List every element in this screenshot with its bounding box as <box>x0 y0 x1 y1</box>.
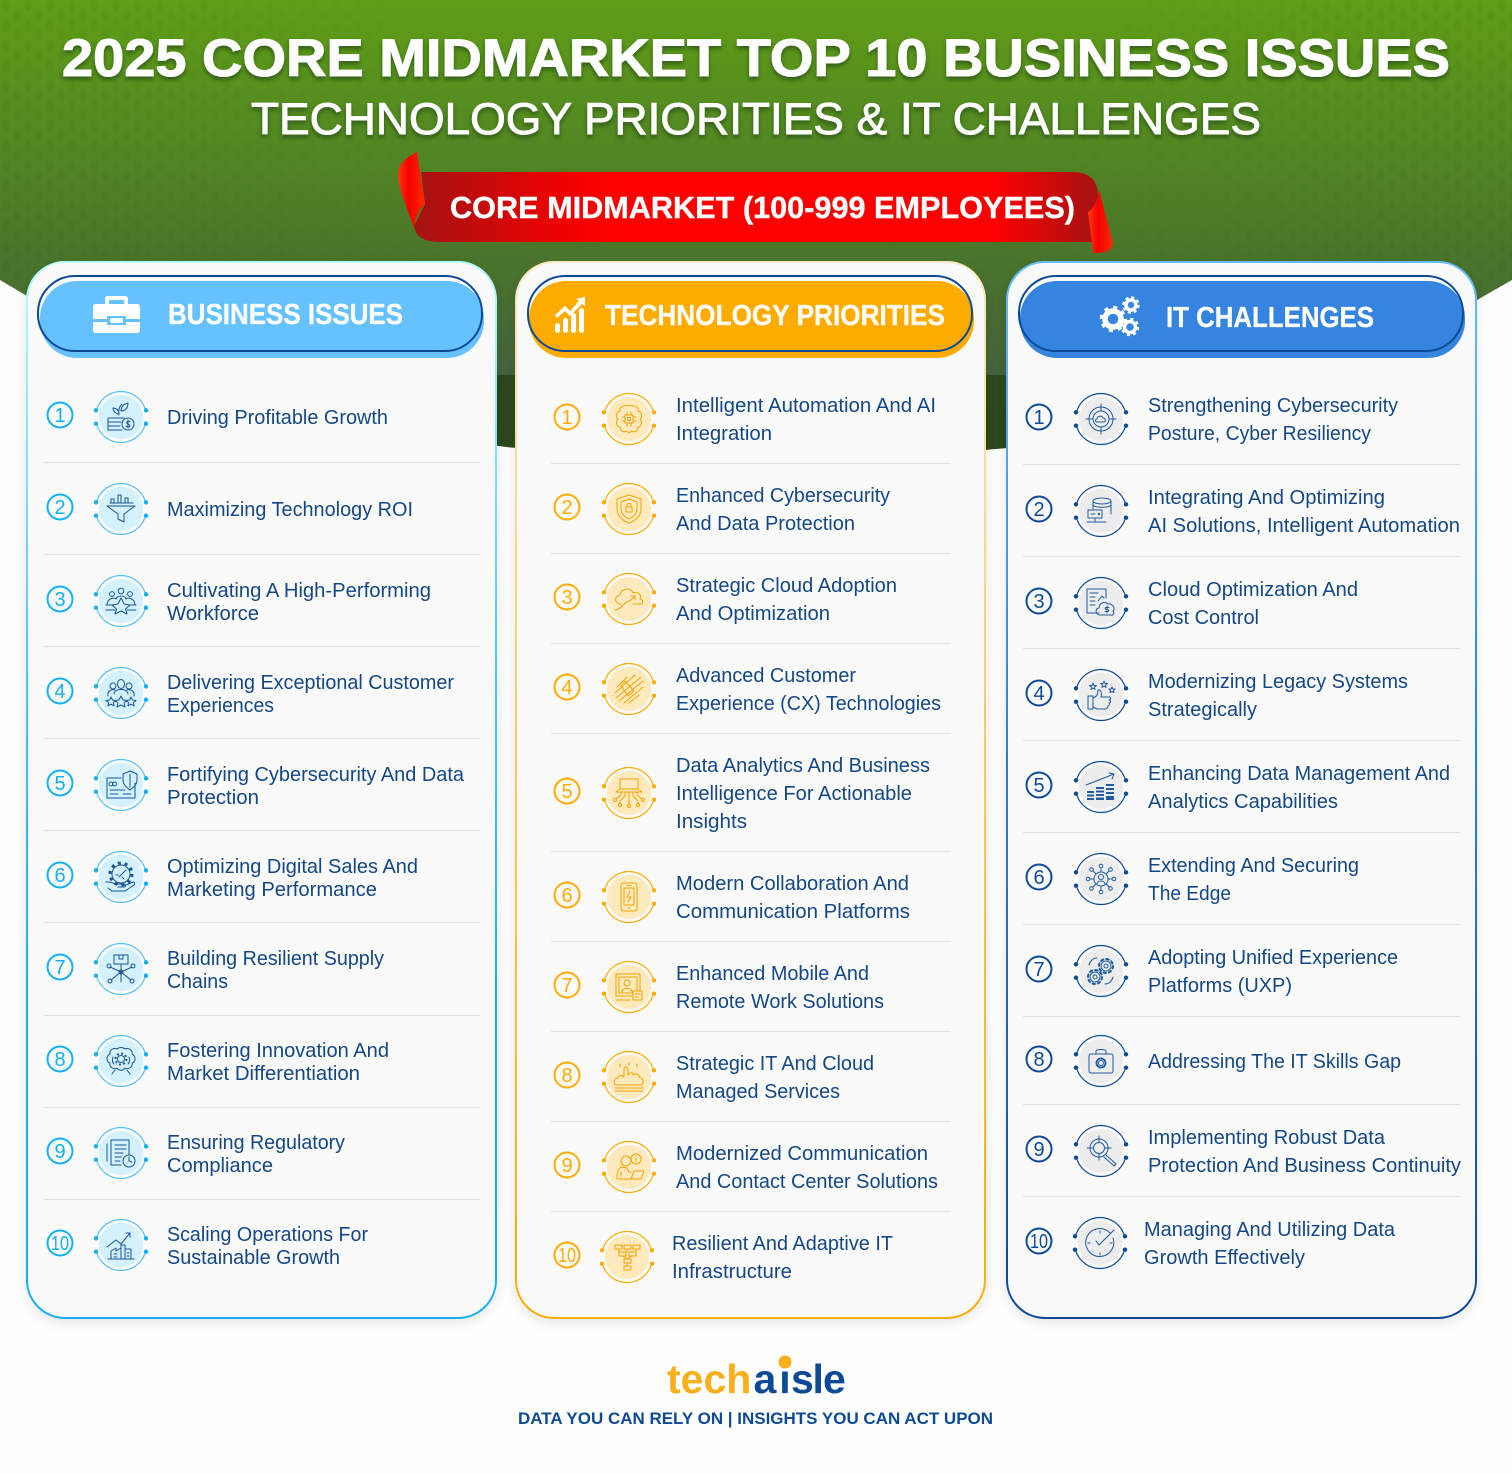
heading text: BUSINESS ISSUES <box>168 299 403 331</box>
row 3 <box>1026 578 1358 629</box>
row 5 <box>554 755 930 833</box>
label: Building Resilient Supply <box>167 948 384 970</box>
icon: thumbs up with stars <box>1074 670 1128 720</box>
label: Analytics Capabilities <box>1148 791 1338 813</box>
label: Market Differentiation <box>167 1063 360 1085</box>
number 3 <box>48 586 72 612</box>
label: Cloud Optimization And <box>1148 579 1358 601</box>
label: Marketing Performance <box>167 879 377 901</box>
number 9: 9 <box>561 1155 573 1177</box>
icon: funnel <box>94 484 148 534</box>
icon: briefcase with gear <box>1074 1036 1128 1086</box>
number 9 <box>554 1152 580 1178</box>
icon: brain with gear <box>94 1036 148 1086</box>
icon: card and shield <box>94 760 148 810</box>
icon: document and clock <box>94 1128 148 1178</box>
label: Data Analytics And Business <box>676 755 930 777</box>
icon: data network <box>602 768 656 818</box>
icon: cost document <box>1074 578 1128 628</box>
label: Scaling Operations For <box>167 1224 368 1246</box>
row 2 <box>1026 486 1460 537</box>
label <box>676 485 890 535</box>
label: AI Solutions, Intelligent Automation <box>1148 515 1460 537</box>
number 7: 7 <box>54 957 66 979</box>
icon: briefcase <box>93 296 140 333</box>
label: Workforce <box>167 603 259 625</box>
label: Maximizing Technology ROI <box>167 499 413 521</box>
label: Advanced Customer <box>676 665 856 687</box>
label: Sustainable Growth <box>167 1247 340 1269</box>
icon: factory and growth chart <box>94 1220 148 1270</box>
row 6 <box>48 852 418 902</box>
row 5 <box>1026 762 1450 813</box>
number 8: 8 <box>1033 1049 1045 1071</box>
row 10 <box>554 1232 893 1283</box>
icon: gears <box>1102 298 1138 335</box>
logo: techaisle: s <box>791 1356 814 1402</box>
number 5 <box>1026 772 1052 798</box>
label: Remote Work Solutions <box>676 991 884 1013</box>
label <box>167 1224 368 1269</box>
icon: contact center agent <box>602 1142 656 1192</box>
label <box>167 1132 345 1177</box>
label: Modern Collaboration And <box>676 873 909 895</box>
number 5 <box>48 770 72 796</box>
row 4 <box>1026 670 1408 721</box>
logo: techaisle: a <box>754 1356 778 1402</box>
label: Cultivating A High-Performing <box>167 580 431 602</box>
label <box>1148 395 1398 445</box>
label <box>167 764 465 809</box>
icon: customer experience hatch <box>602 664 656 714</box>
logo: techaisle: i <box>779 1356 791 1402</box>
label: Strategic IT And Cloud <box>676 1053 874 1075</box>
row 7 <box>1026 946 1398 997</box>
icon: magnifier target <box>1074 1126 1128 1176</box>
label: Intelligent Automation And AI <box>676 395 936 417</box>
label: Integrating And Optimizing <box>1148 487 1385 509</box>
label: Ensuring Regulatory <box>167 1132 345 1154</box>
heading: IT challenges <box>1019 276 1465 358</box>
label <box>676 575 897 625</box>
row 9 <box>554 1142 938 1193</box>
number 3: 3 <box>1033 591 1045 613</box>
label: Resilient And Adaptive IT <box>672 1233 893 1255</box>
icon: clock with check <box>1073 1218 1127 1268</box>
subtitle: TECHNOLOGY PRIORITIES & IT CHALLENGES <box>251 95 1261 144</box>
number 6 <box>1026 864 1052 890</box>
label <box>167 856 418 901</box>
number 3: 3 <box>54 589 66 611</box>
label: Experiences <box>167 695 274 717</box>
label: And Data Protection <box>676 513 855 535</box>
logo: techaisle: e <box>823 1356 846 1402</box>
label: Insights <box>676 811 747 833</box>
panel: IT challenges <box>1007 262 1476 1318</box>
icon: rising bar chart <box>555 297 585 333</box>
label <box>1148 855 1359 905</box>
heading: business issues <box>38 276 484 358</box>
label <box>167 580 431 625</box>
number 7 <box>48 954 72 980</box>
number 9 <box>48 1138 72 1164</box>
number 1 <box>554 404 580 430</box>
row 6 <box>554 872 910 923</box>
row 10 <box>48 1220 368 1270</box>
row 7 <box>554 962 884 1013</box>
row 3 <box>48 576 431 626</box>
icon: cyber target <box>1074 394 1128 444</box>
heading text: IT CHALLENGES <box>1166 302 1374 334</box>
number 2 <box>48 494 72 520</box>
number 3 <box>554 584 580 610</box>
icon: smartphone <box>602 872 656 922</box>
number 3: 3 <box>561 587 573 609</box>
row 6 <box>1026 854 1359 905</box>
label: Modernizing Legacy Systems <box>1148 671 1408 693</box>
row 4 <box>48 668 454 718</box>
label: Delivering Exceptional Customer <box>167 672 454 694</box>
label <box>167 948 384 993</box>
label: Modernized Communication <box>676 1143 928 1165</box>
icon: supply chain network <box>94 944 148 994</box>
label: Compliance <box>167 1155 273 1177</box>
label: Enhancing Data Management And <box>1148 763 1450 785</box>
number 5: 5 <box>561 781 573 803</box>
number 1: 1 <box>561 407 573 429</box>
logo: techaisle: tech <box>667 1356 751 1402</box>
logo: techaisle <box>667 1356 846 1402</box>
label: Posture, Cyber Resiliency <box>1148 423 1371 445</box>
label <box>1148 487 1460 537</box>
row 7 <box>48 944 384 994</box>
number 1: 1 <box>54 405 66 427</box>
number 7 <box>1026 956 1052 982</box>
number 7: 7 <box>561 975 573 997</box>
number 10: 10 <box>558 1245 576 1267</box>
panel: business issues <box>27 262 496 1318</box>
number 5: 5 <box>54 773 66 795</box>
label: Driving Profitable Growth <box>167 407 388 429</box>
label <box>676 1143 938 1193</box>
label: Protection <box>167 787 259 809</box>
row 1 <box>48 392 388 442</box>
icon: flow funnel chart <box>600 1232 654 1282</box>
icon: edge network <box>1074 854 1128 904</box>
tagline: DATA YOU CAN RELY ON | INSIGHTS YOU CAN ACT UPON <box>518 1409 993 1428</box>
number 9: 9 <box>54 1141 66 1163</box>
number 3 <box>1026 588 1052 614</box>
number 10: 10 <box>1030 1231 1048 1253</box>
panel: technology priorities <box>516 262 985 1318</box>
row 2 <box>554 484 890 535</box>
label <box>167 672 454 717</box>
number 10: 10 <box>51 1233 69 1255</box>
label: Optimizing Digital Sales And <box>167 856 418 878</box>
label: Chains <box>167 971 228 993</box>
green header background <box>0 0 1512 475</box>
logo: techaisle: l <box>812 1356 824 1402</box>
number 8 <box>48 1046 72 1072</box>
number 4 <box>554 674 580 700</box>
row 4 <box>554 664 941 715</box>
number 4: 4 <box>1033 683 1045 705</box>
label <box>167 1040 389 1085</box>
row 8 <box>1026 1036 1401 1086</box>
number 8 <box>1026 1046 1052 1072</box>
icon: cloud with line <box>602 574 656 624</box>
label: And Optimization <box>676 603 830 625</box>
icon: database server <box>1074 486 1128 536</box>
label: Addressing The IT Skills Gap <box>1148 1051 1401 1073</box>
number 7 <box>554 972 580 998</box>
row 8 <box>554 1052 874 1103</box>
label <box>1148 947 1398 997</box>
label <box>676 395 936 445</box>
label: Cost Control <box>1148 607 1259 629</box>
label <box>672 1233 893 1283</box>
label: Managing And Utilizing Data <box>1144 1219 1396 1241</box>
label: Managed Services <box>676 1081 840 1103</box>
ribbon banner <box>398 152 1113 253</box>
number 2: 2 <box>561 497 573 519</box>
label: Communication Platforms <box>676 901 910 923</box>
number 6: 6 <box>561 885 573 907</box>
label: Growth Effectively <box>1144 1247 1305 1269</box>
label: Platforms (UXP) <box>1148 975 1292 997</box>
row 1 <box>1026 394 1398 445</box>
number 5: 5 <box>1033 775 1045 797</box>
label: Protection And Business Continuity <box>1148 1155 1461 1177</box>
number 2: 2 <box>1033 499 1045 521</box>
label <box>676 963 884 1013</box>
label: Intelligence For Actionable <box>676 783 912 805</box>
title: 2025 CORE MIDMARKET TOP 10 BUSINESS ISSUES <box>62 29 1450 88</box>
label <box>676 665 941 715</box>
label: Extending And Securing <box>1148 855 1359 877</box>
row 8 <box>48 1036 389 1086</box>
number 8 <box>554 1062 580 1088</box>
heading: technology priorities <box>528 276 974 358</box>
row 10 <box>1026 1218 1396 1269</box>
number 2 <box>554 494 580 520</box>
label: Experience (CX) Technologies <box>676 693 941 715</box>
number 1 <box>1026 404 1052 430</box>
label: Infrastructure <box>672 1261 792 1283</box>
row 3 <box>554 574 897 625</box>
number 4: 4 <box>561 677 573 699</box>
icon: cloud services <box>602 1052 656 1102</box>
icon: data bars with arrow <box>1074 762 1128 812</box>
number 8: 8 <box>561 1065 573 1087</box>
number 2: 2 <box>54 497 66 519</box>
label: Strategically <box>1148 699 1257 721</box>
icon: unified gears <box>1074 946 1128 996</box>
label <box>676 1053 874 1103</box>
number 4 <box>48 678 72 704</box>
label: Fostering Innovation And <box>167 1040 389 1062</box>
label <box>1148 671 1408 721</box>
icon: plant and coins <box>94 392 148 442</box>
label: Enhanced Mobile And <box>676 963 869 985</box>
label <box>1148 1127 1461 1177</box>
number 6 <box>554 882 580 908</box>
label: Strategic Cloud Adoption <box>676 575 897 597</box>
label: The Edge <box>1148 883 1231 905</box>
number 8: 8 <box>54 1049 66 1071</box>
number 4: 4 <box>54 681 66 703</box>
icon: gear and gauge in hand <box>94 852 148 902</box>
number 9 <box>1026 1136 1052 1162</box>
row 5 <box>48 760 465 810</box>
number 1: 1 <box>1033 407 1045 429</box>
number 9: 9 <box>1033 1139 1045 1161</box>
label <box>1148 763 1450 813</box>
number 6: 6 <box>54 865 66 887</box>
number 6 <box>48 862 72 888</box>
number 7: 7 <box>1033 959 1045 981</box>
number 2 <box>1026 496 1052 522</box>
number 4 <box>1026 680 1052 706</box>
number 1 <box>48 402 72 428</box>
label: Fortifying Cybersecurity And Data <box>167 764 465 786</box>
row 9 <box>1026 1126 1461 1177</box>
icon: remote worker screen <box>602 962 656 1012</box>
icon: brain chip <box>602 394 656 444</box>
row 1 <box>554 394 936 445</box>
label: Enhanced Cybersecurity <box>676 485 890 507</box>
label: Integration <box>676 423 772 445</box>
label: Strengthening Cybersecurity <box>1148 395 1398 417</box>
ribbon text: CORE MIDMARKET (100-999 EMPLOYEES) <box>450 190 1075 225</box>
label: Implementing Robust Data <box>1148 1127 1386 1149</box>
icon: customers with stars <box>94 668 148 718</box>
row 2 <box>48 484 413 534</box>
label <box>676 755 930 833</box>
icon: team with star <box>94 576 148 626</box>
icon: shield <box>602 484 656 534</box>
number 6: 6 <box>1033 867 1045 889</box>
label <box>1144 1219 1396 1269</box>
row 9 <box>48 1128 345 1178</box>
heading text: TECHNOLOGY PRIORITIES <box>605 300 945 332</box>
label: And Contact Center Solutions <box>676 1171 938 1193</box>
number 5 <box>554 778 580 804</box>
label <box>1148 579 1358 629</box>
label <box>676 873 910 923</box>
label: Adopting Unified Experience <box>1148 947 1398 969</box>
